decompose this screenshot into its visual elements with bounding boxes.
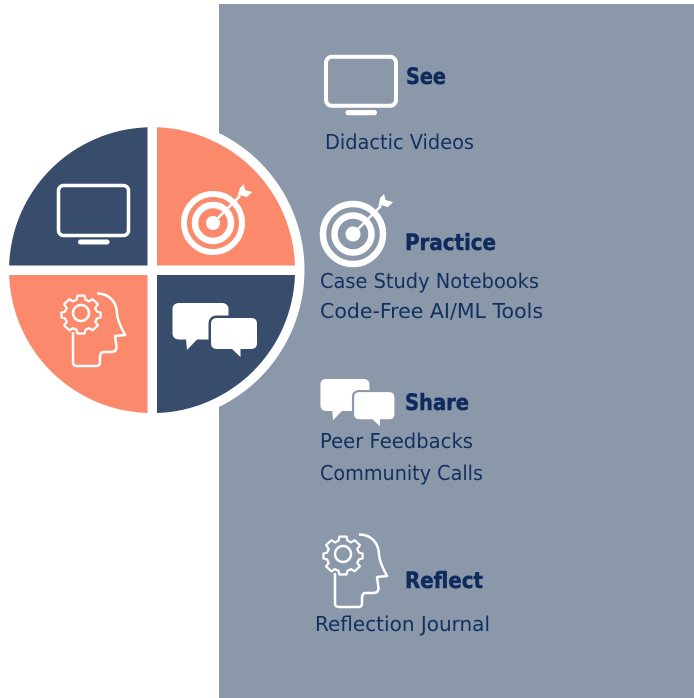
heading: Share: Share xyxy=(405,391,469,416)
panel: quadrant circle xyxy=(0,118,304,422)
quadrant: top left xyxy=(9,127,147,266)
icon: chat bubbles xyxy=(320,379,394,426)
text: Reflection Journal: Reflection Journal xyxy=(315,612,490,636)
text: Didactic Videos: Didactic Videos xyxy=(325,130,474,154)
icon: head with gear in circle xyxy=(61,294,125,366)
group: Reflect xyxy=(315,534,490,636)
text: Case Study Notebooks: Case Study Notebooks xyxy=(320,269,539,293)
text: Peer Feedbacks: Peer Feedbacks xyxy=(320,429,473,453)
heading: Reflect: Reflect xyxy=(405,569,483,594)
text: Community Calls: Community Calls xyxy=(320,461,483,485)
icon: head with gear xyxy=(323,534,387,607)
group: See xyxy=(325,57,474,154)
quadrant: bottom left xyxy=(9,275,147,413)
heading: See: See xyxy=(406,65,446,90)
icon: target xyxy=(323,194,393,264)
text: Code-Free AI/ML Tools: Code-Free AI/ML Tools xyxy=(320,299,543,323)
icon: chat bubbles in circle xyxy=(172,303,257,357)
group: Practice xyxy=(320,194,543,323)
icon: monitor xyxy=(326,57,396,115)
panel: grey background xyxy=(219,4,694,698)
icon: monitor in circle xyxy=(58,186,128,244)
group: Share xyxy=(320,379,483,485)
heading: Practice: Practice xyxy=(405,231,496,256)
quadrant: top right xyxy=(157,127,295,266)
quadrant: bottom right xyxy=(157,275,295,413)
icon: target in circle xyxy=(184,184,252,252)
